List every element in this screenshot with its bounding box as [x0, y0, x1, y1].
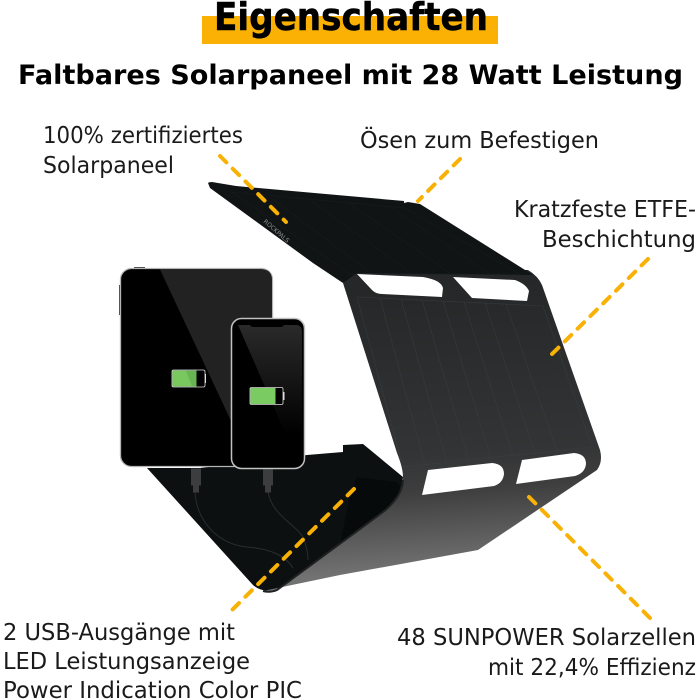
label: eyelets: Ösen zum Befestigen: [360, 126, 599, 154]
label: ETFE coating: Beschichtung: [542, 227, 696, 253]
callout line: certified panel: [220, 156, 286, 222]
label: USB outputs: LED Leistungsanzeige: [3, 649, 250, 675]
handle slot 1: [357, 274, 443, 297]
label: ETFE coating: Kratzfeste ETFE-: [514, 197, 696, 223]
phone body: [232, 318, 304, 468]
tablet battery icon: [172, 370, 206, 387]
tablet screen reflection: [160, 270, 272, 440]
brand mark on panel: ROCKPALS: [262, 218, 291, 245]
tablet: [119, 267, 272, 466]
label: certified panel: 100% zertifiziertes: [43, 123, 243, 149]
USB cable plug, tablet: [191, 468, 201, 492]
subtitle: Faltbares Solarpaneel mit 28 Watt Leistung: [18, 60, 683, 91]
label: USB outputs: 2 USB-Ausgänge mit: [3, 620, 235, 646]
folded solar panel: [147, 182, 601, 592]
phone screen reflection: [238, 325, 302, 435]
USB cable plug, phone: [263, 470, 273, 492]
callout line: eyelets: [418, 159, 460, 201]
inner shadow: [340, 477, 400, 545]
top panel: [208, 182, 533, 283]
phone battery icon: [250, 388, 284, 404]
handle slot 4: [516, 453, 586, 484]
label: SUNPOWER cells: 48 SUNPOWER Solarzellen: [397, 625, 696, 651]
charging cables: [195, 492, 308, 568]
phone notch: [248, 321, 286, 327]
tablet body: [120, 268, 272, 466]
title highlight bar: [202, 16, 498, 44]
callout line: SUNPOWER cells: [529, 497, 653, 621]
middle panel and bottom face: [263, 270, 601, 592]
top panel cell lines: [232, 192, 520, 274]
handle slot 3: [422, 463, 504, 495]
label: certified panel: Solarpaneel: [43, 153, 174, 179]
inner side of lower panel: [147, 444, 403, 591]
callout line: ETFE coating: [547, 259, 648, 359]
callout line: USB outputs: [229, 489, 354, 613]
tablet side buttons: [119, 267, 145, 315]
solar cell grid on middle panel: [357, 297, 592, 467]
fold edge: [263, 480, 403, 592]
smartphone: [232, 318, 304, 468]
handle slot 2: [453, 277, 529, 301]
